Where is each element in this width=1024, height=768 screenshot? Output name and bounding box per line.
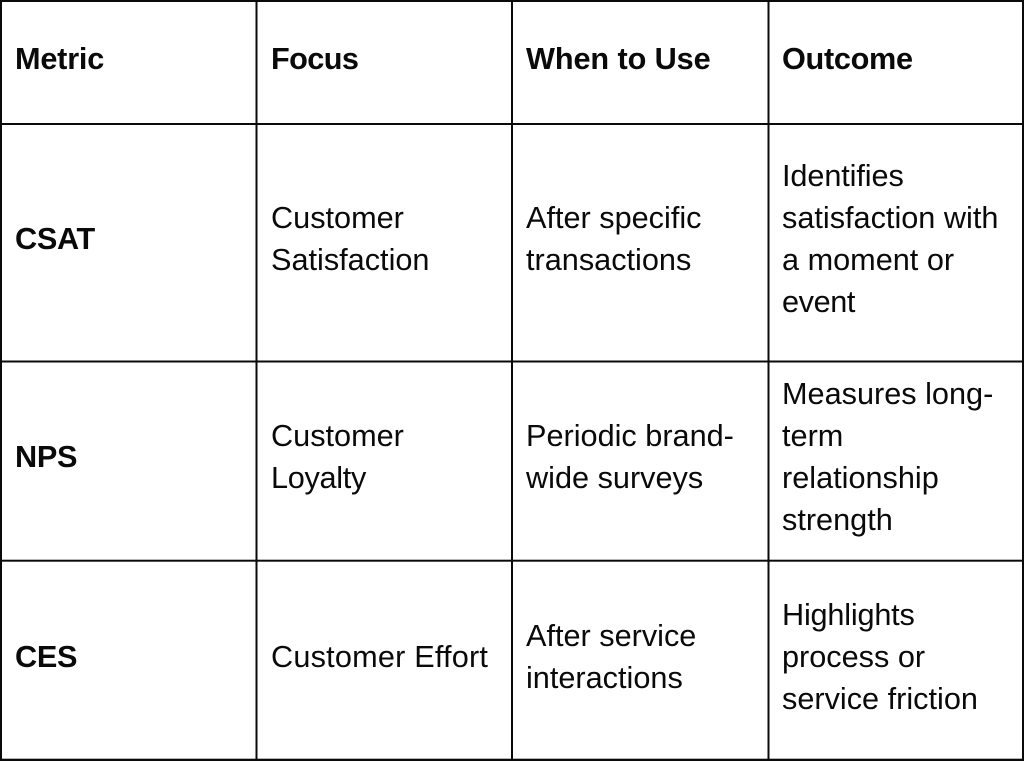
row CES: outcome: process or	[782, 640, 925, 674]
row CSAT: when to use: transactions	[526, 243, 691, 277]
header: Focus: Focus	[271, 42, 358, 76]
row CES: outcome	[782, 598, 978, 716]
row NPS: focus: Customer	[271, 419, 404, 453]
row NPS: outcome: term	[782, 419, 843, 453]
row NPS: focus	[271, 419, 404, 495]
row CSAT: outcome: satisfaction with	[782, 201, 998, 235]
row CSAT: outcome	[782, 159, 998, 319]
row NPS: outcome	[782, 377, 993, 537]
header: Metric: Metric	[15, 42, 104, 76]
row CSAT: focus: Satisfaction	[271, 243, 429, 277]
row CSAT: focus	[271, 201, 429, 277]
row NPS: outcome: relationship	[782, 461, 939, 495]
row NPS: when to use: wide surveys	[526, 461, 703, 495]
row CES: when to use: interactions	[526, 661, 683, 695]
row NPS: outcome: Measures long-	[782, 377, 993, 411]
row CSAT: focus: Customer	[271, 201, 404, 235]
row CSAT: outcome: Identifies	[782, 159, 904, 193]
row CES: focus: Customer Effort	[271, 640, 488, 674]
header: Outcome: Outcome	[782, 42, 913, 76]
row CSAT: metric: CSAT	[15, 222, 95, 256]
row CES: when to use: After service	[526, 619, 696, 653]
row CSAT: outcome: a moment or	[782, 243, 954, 277]
row CES: outcome: Highlights	[782, 598, 915, 632]
header: When to Use: When to Use	[526, 42, 711, 76]
row NPS: when to use	[526, 419, 734, 495]
row CSAT: outcome: event	[782, 285, 855, 319]
row NPS: outcome: strength	[782, 503, 893, 537]
row CES: metric: CES	[15, 640, 77, 674]
row CES: outcome: service friction	[782, 682, 978, 716]
row NPS: metric: NPS	[15, 440, 77, 474]
row CSAT: when to use: After specific	[526, 201, 701, 235]
row NPS: when to use: Periodic brand-	[526, 419, 734, 453]
row CES: when to use	[526, 619, 696, 695]
row NPS: focus: Loyalty	[271, 461, 366, 495]
row CSAT: when to use	[526, 201, 701, 277]
